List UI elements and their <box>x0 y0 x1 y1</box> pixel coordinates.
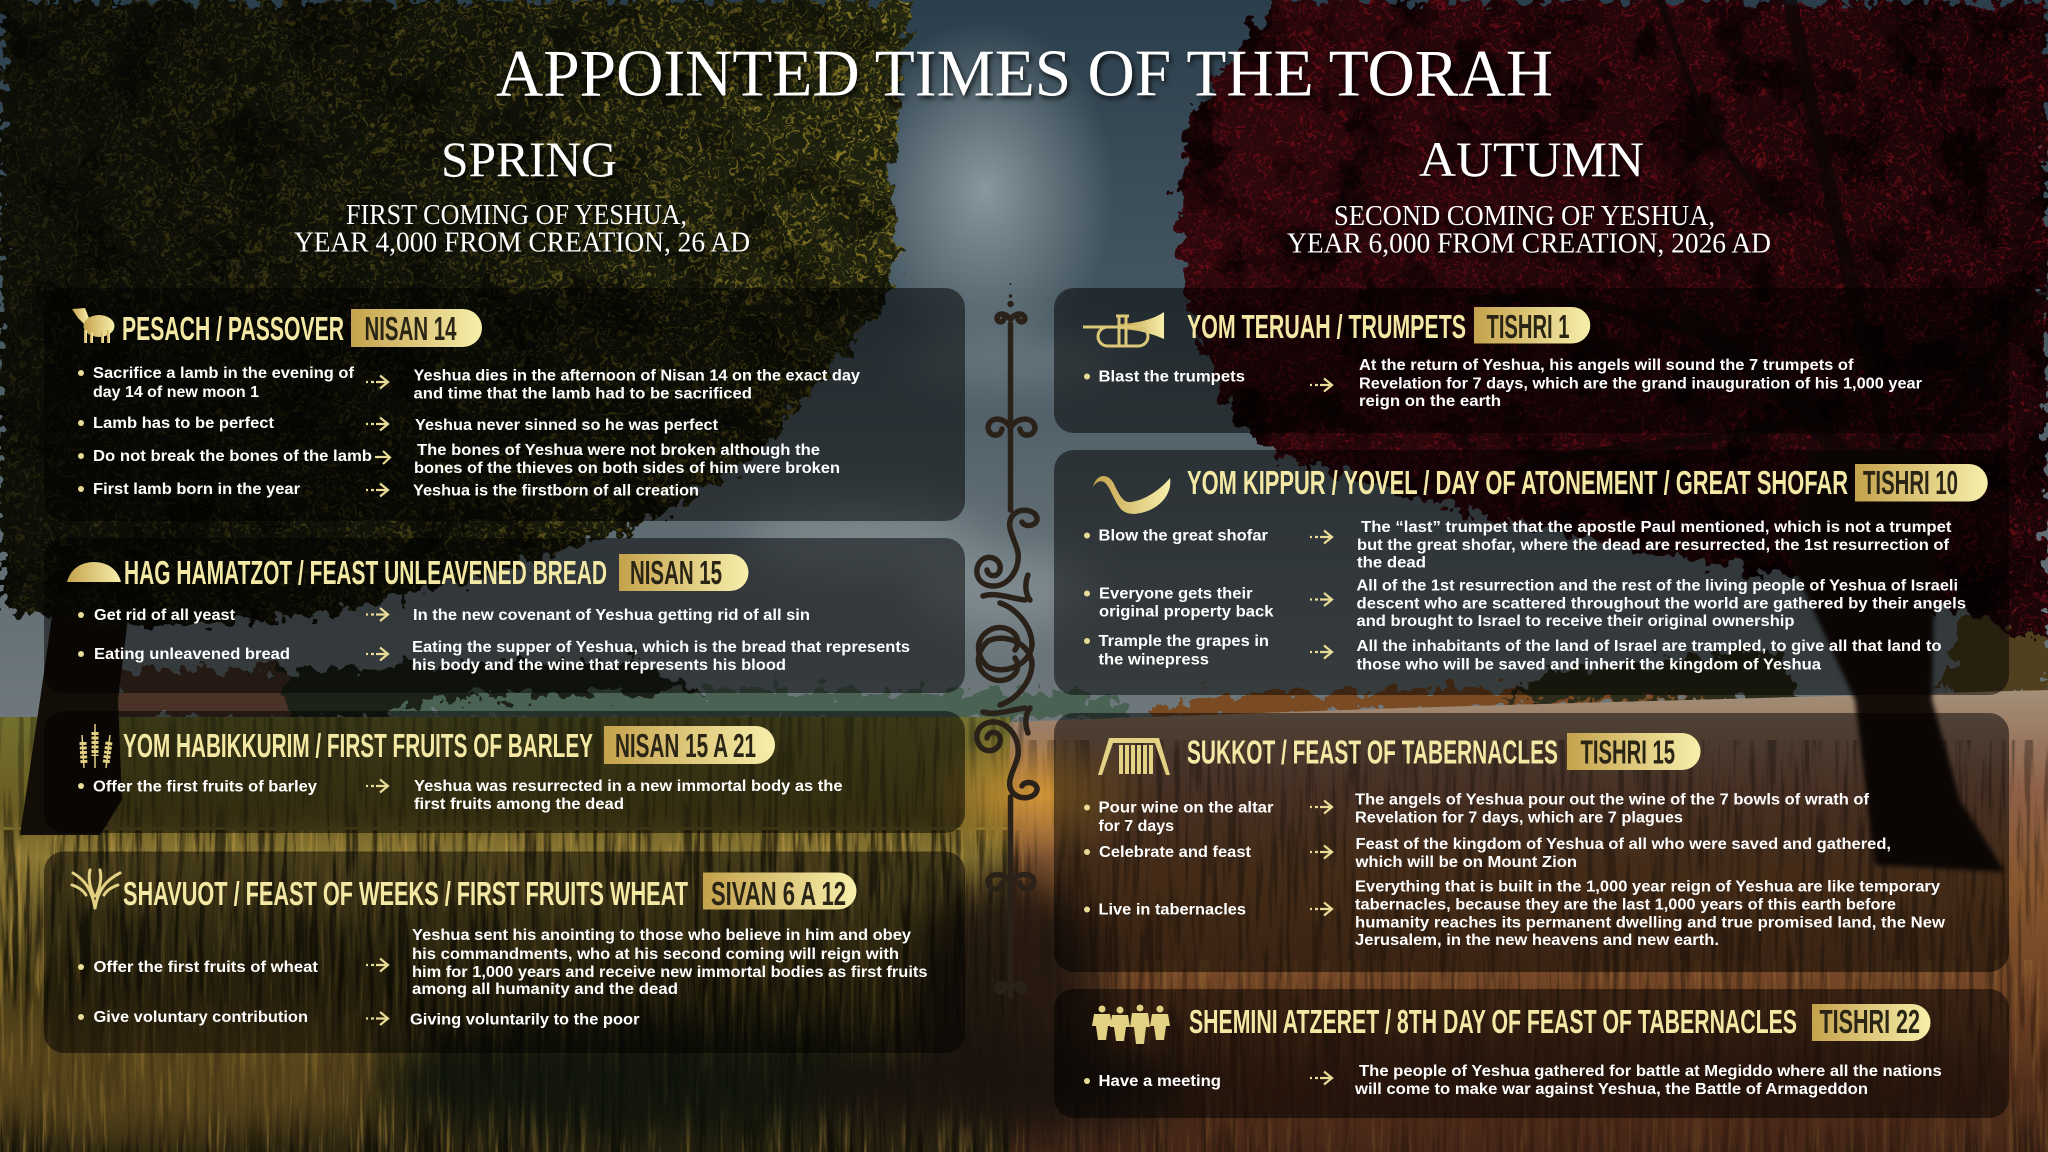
row: great shofar: The “last” trumpet that the apostle Paul mentioned, which is not a trumpet <box>1361 519 1952 536</box>
row: first lamb <box>78 481 699 500</box>
icon: bread <box>67 562 121 582</box>
subheading: second coming: SECOND COMING OF YESHUA, <box>1334 201 1715 232</box>
row: barley offering: first fruits among the dead <box>414 796 624 813</box>
subheading: second coming <box>1287 201 1771 260</box>
row: trample grapes: All the inhabitants of the land of Israel are trampled, to give all that land to <box>1356 638 1942 655</box>
title: APPOINTED TIMES OF THE TORAH <box>496 36 1553 110</box>
row: pour wine: for 7 days <box>1098 818 1174 835</box>
row: original property: original property back <box>1099 604 1274 620</box>
row: do not break bones: bones of the thieves on both sides of him were broken <box>414 460 840 477</box>
heading: hag hamatzot: HAG HAMATZOT / FEAST UNLEAVENED BREAD <box>124 554 607 591</box>
row: do not break bones <box>78 442 840 477</box>
row: lamb perfect: Lamb has to be perfect <box>93 415 274 432</box>
icon: wheat blades <box>72 870 120 908</box>
row: blast the trumpets <box>1084 357 1922 410</box>
row: original property: descent who are scattered throughout the world are gathered by their angels <box>1356 596 1966 612</box>
row: pour wine: The angels of Yeshua pour out the wine of the 7 bowls of wrath of <box>1355 792 1870 808</box>
row: pour wine <box>1084 792 1870 835</box>
row: lamb perfect <box>78 415 718 434</box>
row: celebrate <box>1084 836 1891 871</box>
panel: shavuot <box>44 852 965 1053</box>
row: blast the trumpets: Revelation for 7 days, which are the grand inauguration of his 1,000 year <box>1359 376 1922 392</box>
icon: barley <box>82 724 110 768</box>
subheading: second coming: YEAR 6,000 FROM CREATION, 2026 AD <box>1287 229 1771 260</box>
heading: shavuot: SHAVUOT / FEAST OF WEEKS / FIRST FRUITS WHEAT <box>123 875 688 912</box>
heading: yom habikkurim: YOM HABIKKURIM / FIRST FRUITS OF BARLEY <box>123 727 593 764</box>
row: celebrate: which will be on Mount Zion <box>1354 854 1577 871</box>
row: blast the trumpets: reign on the earth <box>1359 393 1501 410</box>
icon: shofar <box>1093 476 1170 514</box>
row: original property <box>1084 578 1966 630</box>
row: trample grapes <box>1084 633 1942 674</box>
row: wheat offering: his commandments, who at his second coming will reign with <box>412 946 899 963</box>
date badge: tishri 15: TISHRI 15 <box>1580 734 1675 770</box>
row: sacrifice a lamb: day 14 of new moon 1 <box>93 384 259 401</box>
row: lamb perfect: Yeshua never sinned so he was perfect <box>415 417 718 434</box>
row: first lamb: Yeshua is the firstborn of all creation <box>413 482 699 500</box>
subheading: first coming <box>294 200 750 259</box>
panel: hag hamatzot <box>44 538 965 693</box>
row: celebrate: Feast of the kingdom of Yeshua of all who were saved and gathered, <box>1356 836 1891 853</box>
row: unleavened bread: Eating the supper of Yeshua, which is the bread that represents <box>412 639 910 656</box>
row: great shofar <box>1084 519 1952 572</box>
row: blast the trumpets: At the return of Yeshua, his angels will sound the 7 trumpets of <box>1359 357 1854 374</box>
row: pour wine: Pour wine on the altar <box>1098 800 1274 816</box>
row: great shofar: Blow the great shofar <box>1098 528 1268 544</box>
panel: yom kippur <box>1054 450 2009 695</box>
heading: pesach: PESACH / PASSOVER <box>122 310 344 347</box>
date badge: nisan 14: NISAN 14 <box>364 310 457 347</box>
row: unleavened bread <box>78 639 910 674</box>
central scroll ornament <box>977 283 1037 996</box>
row: wheat offering: Yeshua sent his anointing to those who believe in him and obey <box>412 927 911 944</box>
date badge: sivan 6 a 12 <box>703 872 856 912</box>
icon: sheep <box>72 308 114 343</box>
row: live in tabernacles <box>1084 878 1946 949</box>
subheading: first coming: FIRST COMING OF YESHUA, <box>346 200 687 231</box>
row: do not break bones: Do not break the bones of the lamb <box>93 448 372 465</box>
row: unleavened bread: Eating unleavened bread <box>94 646 290 663</box>
row: voluntary contribution <box>78 1009 640 1028</box>
row: live in tabernacles: Jerusalem, in the new heavens and new earth. <box>1355 932 1719 949</box>
row: great shofar: the dead <box>1357 554 1426 572</box>
date badge: tishri 10: TISHRI 10 <box>1863 464 1958 501</box>
panel: yom habikkurim <box>44 711 965 833</box>
panel: yom teruah <box>1054 288 2009 433</box>
date badge: tishri 1: TISHRI 1 <box>1486 308 1570 345</box>
row: original property: All of the 1st resurrection and the rest of the living people of Yeshua of Israeli <box>1356 578 1958 594</box>
row: have a meeting: will come to make war against Yeshua, the Battle of Armageddon <box>1354 1081 1868 1098</box>
row: unleavened bread: his body and the wine that represents his blood <box>412 657 786 674</box>
panel: sukkot <box>1054 713 2009 972</box>
row: yeast <box>78 607 810 624</box>
heading: sukkot: SUKKOT / FEAST OF TABERNACLES <box>1187 734 1558 770</box>
heading: autumn: AUTUMN <box>1419 131 1644 187</box>
row: yeast: Get rid of all yeast <box>94 607 235 624</box>
row: wheat offering: him for 1,000 years and receive new immortal bodies as first fruits <box>412 964 928 981</box>
date badge: nisan 15 a 21 <box>604 726 775 764</box>
date badge: tishri 1 <box>1474 307 1590 345</box>
row: sacrifice a lamb: and time that the lamb had to be sacrificed <box>414 386 752 402</box>
row: have a meeting: Have a meeting <box>1098 1073 1221 1090</box>
icon: trumpet <box>1083 312 1164 346</box>
row: original property: and brought to Israel to receive their original ownership <box>1356 613 1794 630</box>
row: sacrifice a lamb: Yeshua dies in the afternoon of Nisan 14 on the exact day <box>414 368 860 384</box>
row: barley offering <box>78 778 843 813</box>
icon: tabernacle <box>1098 738 1170 775</box>
row: live in tabernacles: Live in tabernacles <box>1098 902 1246 918</box>
row: sacrifice a lamb <box>78 365 860 402</box>
date badge: nisan 15 a 21: NISAN 15 A 21 <box>615 727 756 764</box>
icon: group of people <box>1092 1004 1170 1044</box>
row: first lamb: First lamb born in the year <box>93 481 300 498</box>
date badge: tishri 22: TISHRI 22 <box>1820 1003 1920 1040</box>
row: voluntary contribution: Give voluntary contribution <box>94 1009 308 1026</box>
row: wheat offering <box>78 927 928 998</box>
row: celebrate: Celebrate and feast <box>1099 844 1251 861</box>
row: trample grapes: those who will be saved and inherit the kingdom of Yeshua <box>1356 656 1821 674</box>
row: wheat offering: Offer the first fruits of wheat <box>94 959 318 976</box>
row: voluntary contribution: Giving voluntarily to the poor <box>410 1012 640 1028</box>
row: trample grapes: the winepress <box>1098 652 1209 668</box>
row: pour wine: Revelation for 7 days, which are 7 plagues <box>1355 810 1683 826</box>
heading: yom teruah: YOM TERUAH / TRUMPETS <box>1187 308 1466 345</box>
row: blast the trumpets: Blast the trumpets <box>1098 368 1245 386</box>
subheading: first coming: YEAR 4,000 FROM CREATION, 26 AD <box>294 228 750 259</box>
row: trample grapes: Trample the grapes in <box>1098 633 1269 650</box>
row: wheat offering: among all humanity and the dead <box>412 981 678 998</box>
date badge: nisan 15: NISAN 15 <box>630 554 722 591</box>
row: great shofar: but the great shofar, where the dead are resurrected, the 1st resurrection of <box>1357 537 1950 554</box>
row: have a meeting <box>1084 1063 1942 1098</box>
panel: pesach <box>44 288 965 521</box>
row: barley offering: Yeshua was resurrected in a new immortal body as the <box>414 778 843 795</box>
row: live in tabernacles: Everything that is built in the 1,000 year reign of Yeshua are like temporary <box>1355 878 1940 896</box>
row: live in tabernacles: humanity reaches its permanent dwelling and true promised land, the New <box>1355 914 1946 932</box>
row: original property: Everyone gets their <box>1099 586 1252 602</box>
row: live in tabernacles: tabernacles, because they are the last 1,000 years of this earth before <box>1355 896 1896 914</box>
row: barley offering: Offer the first fruits of barley <box>93 778 317 796</box>
date badge: sivan 6 a 12: SIVAN 6 A 12 <box>711 875 846 912</box>
row: sacrifice a lamb: Sacrifice a lamb in the evening of <box>93 365 355 382</box>
row: have a meeting: The people of Yeshua gathered for battle at Megiddo where all the nations <box>1359 1063 1942 1080</box>
row: do not break bones: The bones of Yeshua were not broken although the <box>417 442 820 459</box>
panel: shemini atzeret <box>1054 989 2009 1118</box>
row: yeast: In the new covenant of Yeshua getting rid of all sin <box>413 607 810 624</box>
heading: spring: SPRING <box>441 131 617 187</box>
date badge: tishri 22 <box>1812 1003 1931 1041</box>
